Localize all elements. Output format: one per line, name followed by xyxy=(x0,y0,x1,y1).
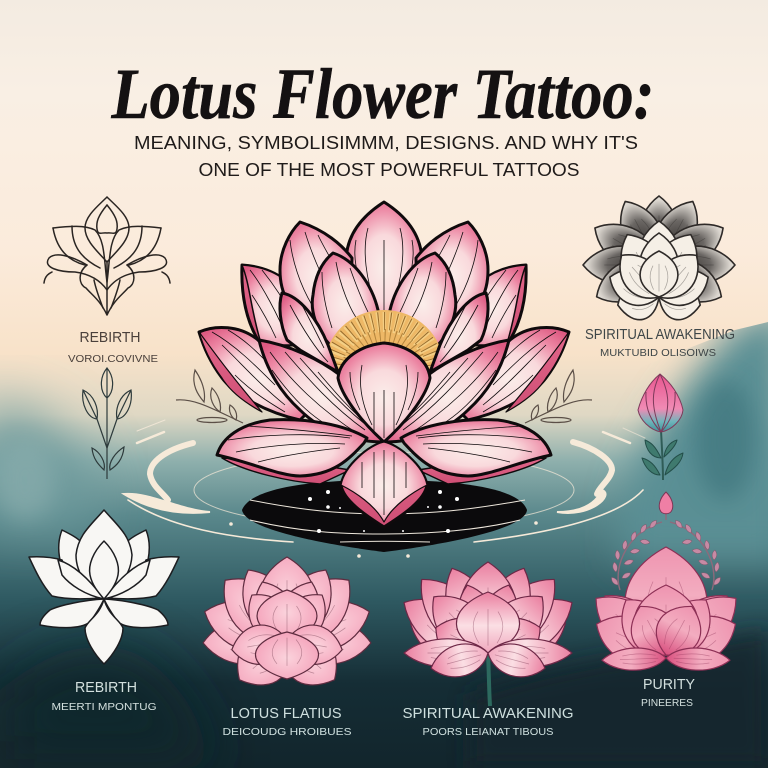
top centre petal xyxy=(346,202,422,322)
petals xyxy=(582,547,750,675)
label: rebirth top xyxy=(68,330,158,365)
back and side petals, right (mirror) xyxy=(390,222,569,420)
icon: pink bud on stem xyxy=(638,374,683,480)
icon: purity lotus with wreath and bud xyxy=(582,492,750,675)
label: spiritual awakening top: SPIRITUAL AWAKENING xyxy=(585,327,735,343)
centre bulb petal xyxy=(338,343,430,442)
label: rebirth top: REBIRTH xyxy=(80,330,140,346)
icon: pink side-view lotus with stem xyxy=(392,560,584,706)
icon: dotwork lotus, top right xyxy=(583,193,735,324)
title: Lotus Flower Tattoo: xyxy=(111,54,654,134)
icon: white outlined lotus xyxy=(29,510,179,664)
back and side petals, left xyxy=(199,222,378,420)
subtitle: ONE OF THE MOST POWERFUL TATTOOS xyxy=(198,160,580,180)
label: purity xyxy=(641,676,695,709)
dark pond under main lotus xyxy=(242,480,527,552)
label: rebirth bottom: REBIRTH xyxy=(75,679,137,696)
right inner petal xyxy=(104,560,150,599)
background: watercolor wash xyxy=(0,237,768,768)
label: purity: PURITY xyxy=(643,676,695,693)
middle petals, left xyxy=(217,293,384,484)
label: rebirth bottom: MEERTI MPONTUG xyxy=(52,701,156,713)
label: spiritual awakening bottom: SPIRITUAL AWAKENING xyxy=(402,705,574,722)
top petal xyxy=(76,510,132,599)
white lotus right half (mirror) xyxy=(104,530,179,628)
lower centre petal xyxy=(341,442,427,527)
label: rebirth bottom xyxy=(52,679,156,713)
label: lotus flatius: LOTUS FLATIUS xyxy=(230,706,342,722)
icon: line art lotus, top left xyxy=(44,197,170,315)
inner pale petals xyxy=(603,221,715,324)
label: spiritual awakening top xyxy=(585,327,735,359)
subtitle: MEANING, SYMBOLISIMMM, DESIGNS. AND WHY IT'S xyxy=(134,133,638,153)
water ripples and swooshes xyxy=(124,420,645,558)
icon: leaf sprig, left xyxy=(83,368,131,479)
icon: pink flat lotus xyxy=(197,557,377,699)
small bud xyxy=(659,492,673,514)
label: lotus flatius: DEICOUDG HROIBUES xyxy=(222,726,352,738)
left inner petal xyxy=(58,560,104,599)
centre inner petal xyxy=(90,541,118,599)
label: spiritual awakening bottom xyxy=(402,705,574,738)
sprig: right of main lotus xyxy=(525,370,592,423)
label: lotus flatius xyxy=(222,706,352,738)
bottom petal xyxy=(85,599,123,664)
label: spiritual awakening bottom: POORS LEIANAT TIBOUS xyxy=(422,726,554,738)
white lotus left half xyxy=(29,530,104,628)
middle petals, right (mirror) xyxy=(384,293,551,484)
label: rebirth top: VOROI.COVIVNE xyxy=(68,353,158,365)
label: spiritual awakening top: MUKTUBID OLISOIWS xyxy=(600,347,716,359)
sprig: left of main lotus xyxy=(176,370,243,423)
main lotus flower xyxy=(199,202,569,527)
outer dark petals xyxy=(583,193,735,314)
wreath xyxy=(610,508,722,590)
subtitle xyxy=(134,133,638,180)
stamens xyxy=(324,310,444,426)
label: purity: PINEERES xyxy=(641,697,693,709)
